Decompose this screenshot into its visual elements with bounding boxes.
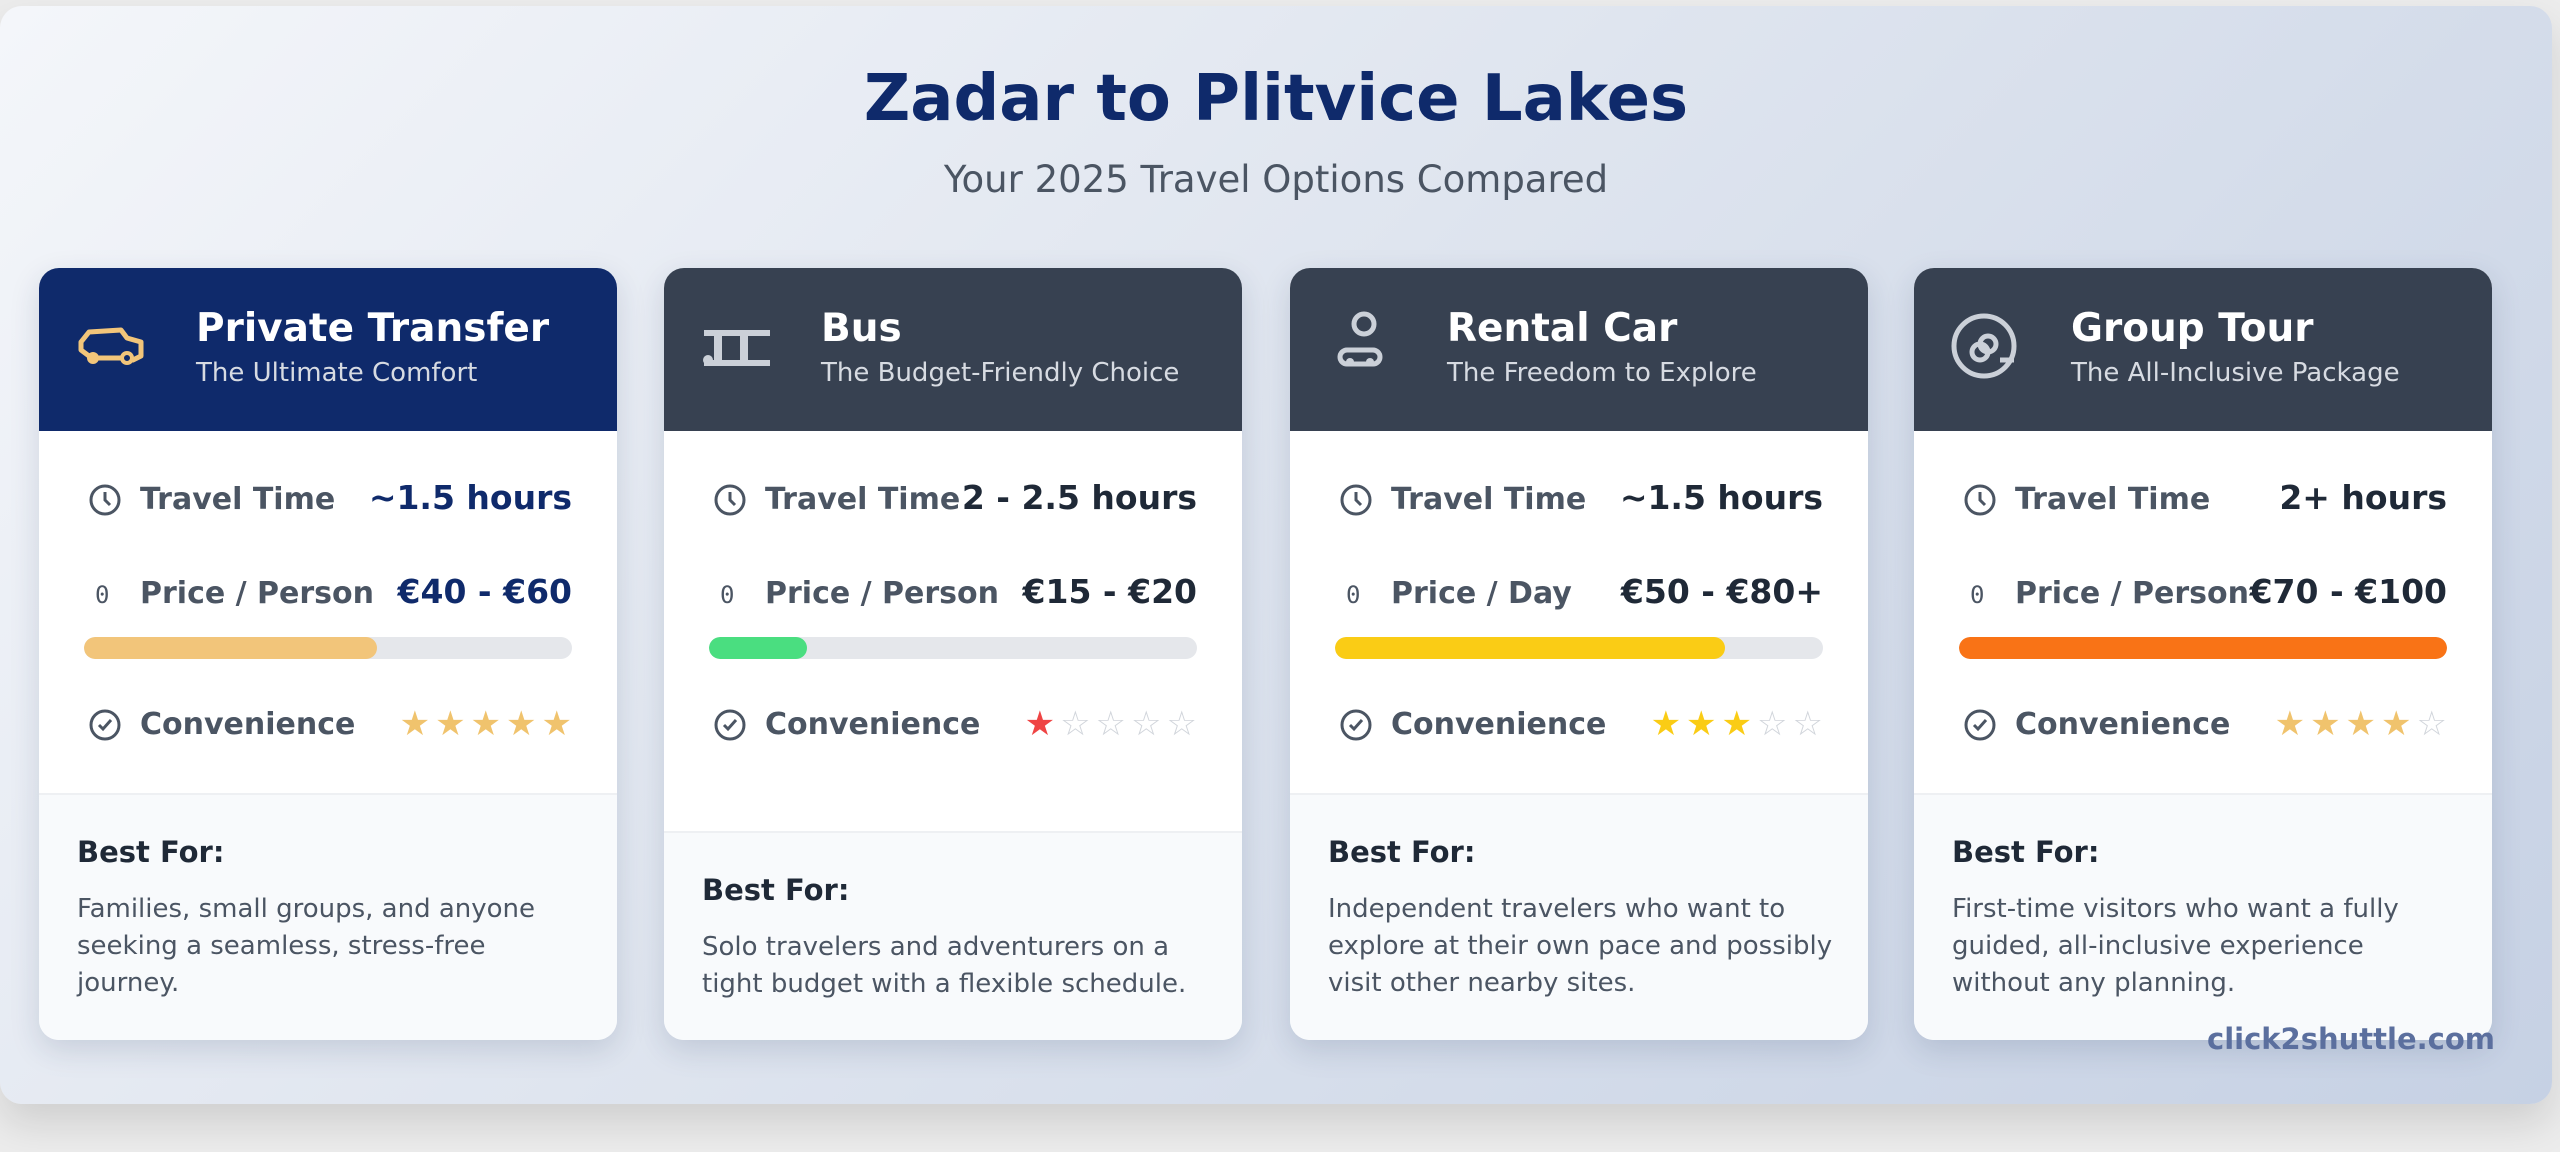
- row: price: 0: [720, 581, 734, 609]
- row: travel time: ~1.5 hours: [1620, 478, 1823, 517]
- row: price: [95, 572, 572, 611]
- row: price: 0: [95, 581, 109, 609]
- header: group tour: [1914, 268, 2492, 431]
- row: travel time: [714, 478, 1197, 517]
- row: price: [1970, 572, 2447, 611]
- row: price: €15 - €20: [1023, 572, 1197, 611]
- row: price: €50 - €80+: [1621, 572, 1823, 611]
- price bar: [709, 637, 1197, 659]
- panel: bus: [664, 268, 1242, 1040]
- price bar: [1959, 637, 2447, 659]
- header: rental car: The Freedom to Explore: [1447, 358, 1757, 388]
- header: group tour: The All-Inclusive Package: [2071, 358, 2400, 388]
- row: convenience: ★★★☆☆: [1651, 704, 1828, 744]
- best for: [39, 793, 617, 1040]
- panel: rental car: [1290, 268, 1868, 1040]
- row: convenience: [90, 704, 577, 744]
- row: convenience: ★★★★☆: [2275, 704, 2452, 744]
- row: travel time: Travel Time: [1391, 482, 1586, 517]
- row: convenience: [1964, 704, 2452, 744]
- row: convenience: ★☆☆☆☆: [1025, 704, 1202, 744]
- best for: Families, small groups, and anyone seeking a seamless, stress-free journey.: [77, 894, 535, 998]
- row: convenience: Convenience: [765, 707, 980, 742]
- price bar: [84, 637, 572, 659]
- header: group tour: Group Tour: [2071, 306, 2314, 351]
- header: private transfer: The Ultimate Comfort: [196, 358, 477, 388]
- row: convenience: ★★★★★: [400, 704, 577, 744]
- row: travel time: Travel Time: [140, 482, 335, 517]
- best for: Best For:: [77, 835, 224, 869]
- row: price: Price / Person: [140, 576, 374, 611]
- watermark: click2shuttle.com: [2207, 1022, 2495, 1056]
- row: price: 0: [1970, 581, 1984, 609]
- row: convenience: [714, 704, 1202, 744]
- panel: group tour: [1914, 268, 2492, 1040]
- best for: Best For:: [1952, 835, 2099, 869]
- icon: rental car: [1338, 312, 1382, 366]
- header: private transfer: [39, 268, 617, 431]
- best for: [1914, 793, 2492, 1040]
- header: bus: Bus: [821, 306, 902, 351]
- row: travel time: Travel Time: [2015, 482, 2210, 517]
- panel: private transfer: [39, 268, 617, 1040]
- row: travel time: [90, 478, 572, 517]
- header: private transfer: Private Transfer: [196, 306, 549, 351]
- row: travel time: ~1.5 hours: [369, 478, 572, 517]
- row: travel time: [1964, 478, 2447, 517]
- price bar: [1335, 637, 1823, 659]
- best for: Best For:: [702, 873, 849, 907]
- best for: First-time visitors who want a fully guided, all-inclusive experience without any planning.: [1952, 894, 2399, 998]
- best for: [664, 831, 1242, 1040]
- subtitle: Your 2025 Travel Options Compared: [944, 158, 1608, 201]
- row: travel time: Travel Time: [765, 482, 960, 517]
- header: rental car: [1290, 268, 1868, 431]
- row: travel time: 2 - 2.5 hours: [962, 478, 1197, 517]
- row: travel time: [1340, 478, 1823, 517]
- row: price: €70 - €100: [2250, 572, 2447, 611]
- row: price: €40 - €60: [398, 572, 572, 611]
- best for: Solo travelers and adventurers on a tight budget with a flexible schedule.: [702, 932, 1186, 999]
- best for: Best For:: [1328, 835, 1475, 869]
- row: convenience: Convenience: [2015, 707, 2230, 742]
- best for: Independent travelers who want to explore at their own pace and possibly visit other nearby sites.: [1328, 894, 1832, 998]
- icon: car: [78, 328, 144, 365]
- row: convenience: Convenience: [1391, 707, 1606, 742]
- row: price: Price / Person: [2015, 576, 2249, 611]
- header: bus: [664, 268, 1242, 431]
- row: price: Price / Day: [1391, 576, 1572, 611]
- icon: bus: [703, 330, 770, 366]
- row: price: [720, 572, 1197, 611]
- row: price: [1346, 572, 1823, 611]
- row: travel time: 2+ hours: [2279, 478, 2447, 517]
- header: rental car: Rental Car: [1447, 306, 1677, 351]
- row: price: Price / Person: [765, 576, 999, 611]
- title: Zadar to Plitvice Lakes: [864, 62, 1688, 136]
- best for: [1290, 793, 1868, 1040]
- icon: group tour: [1952, 314, 2016, 378]
- header: bus: The Budget-Friendly Choice: [821, 358, 1179, 388]
- row: price: 0: [1346, 581, 1360, 609]
- row: convenience: [1340, 704, 1828, 744]
- row: convenience: Convenience: [140, 707, 355, 742]
